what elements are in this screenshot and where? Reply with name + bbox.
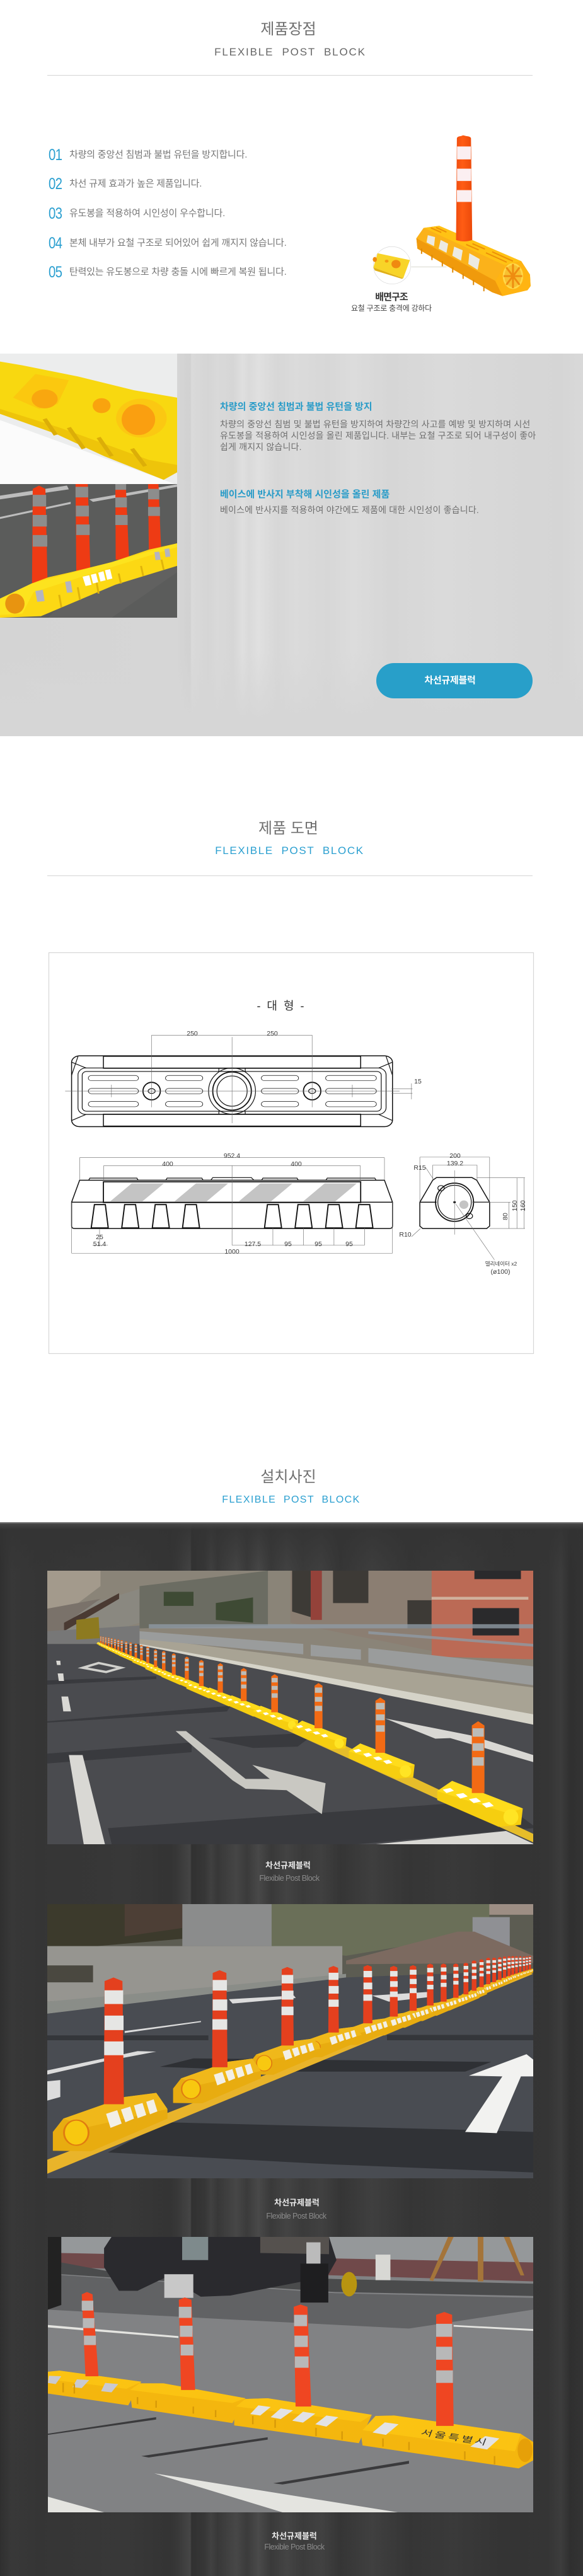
button: 차선규제블럭	[424, 675, 475, 686]
heading: installation photos: 설치사진	[260, 1469, 316, 1486]
photo 3: close-up of posts and blocks	[48, 2237, 533, 2512]
inset title: 배면구조	[375, 292, 408, 303]
feature 2 body: 베이스에 반사지를 적용하여 야간에도 제품에 대한 시인성이 좋습니다.	[220, 505, 479, 515]
list item 05: 탄력있는 유도봉으로 차량 충돌 시에 빠르게 복원 됩니다.	[69, 267, 287, 277]
subtitle: FLEXIBLE POST BLOCK	[222, 1494, 361, 1505]
divider	[47, 875, 533, 876]
caption 2 title: 차선규제블럭	[274, 2198, 320, 2207]
orange posts	[82, 2292, 454, 2426]
list item 01: 차량의 중앙선 침범과 불법 유턴을 방지합니다.	[69, 149, 247, 160]
dimension labels: 95	[315, 1240, 322, 1248]
dimension labels: 200	[449, 1152, 461, 1160]
dimension labels: 139.2	[447, 1160, 463, 1167]
end view of block	[412, 1157, 525, 1260]
section heading: installation photos	[222, 1469, 361, 1505]
top view of block	[65, 1035, 412, 1126]
photo: posts on road	[0, 484, 177, 618]
dimension labels: 127.5	[245, 1240, 261, 1248]
dimension labels: 1000	[224, 1248, 240, 1256]
list item 02: 02	[49, 175, 62, 193]
drawing title: - 대 형 -	[257, 1000, 304, 1012]
yellow bases	[0, 543, 177, 618]
button	[376, 663, 533, 698]
dimension labels: 95	[345, 1240, 353, 1248]
dimension labels: 델리네이터 x2	[485, 1261, 517, 1267]
side view of block	[72, 1158, 393, 1253]
heading: product drawing: 제품 도면	[258, 820, 318, 837]
list item 03	[49, 205, 225, 222]
dimension labels: 250	[267, 1030, 278, 1037]
dimension labels: R10	[399, 1231, 412, 1239]
dimension labels: R15	[413, 1164, 426, 1172]
caption 1 title: 차선규제블럭	[265, 1861, 311, 1870]
block lettering: 서울특별시	[419, 2428, 490, 2447]
list item 02	[49, 175, 202, 193]
feature 2 heading: 베이스에 반사지 부착해 시인성을 올린 제품	[220, 489, 390, 500]
caption 2 subtitle: Flexible Post Block	[266, 2212, 326, 2221]
feature 1 body: 차량의 중앙선 침범 및 불법 유턴을 방지하여 차량간의 사고를 예방 및 방지하며 시선 유도봉을 적용하여 시인성을 올린 제품입니다. 내부는 요철 구조로 되어 내구성이 좋아 쉽게 깨지지 않습니다.	[220, 419, 536, 452]
list item 03: 유도봉을 적용하여 시인성이 우수합니다.	[69, 208, 225, 219]
dimension labels: 25	[96, 1233, 103, 1241]
list item 04: 본체 내부가 요철 구조로 되어있어 쉽게 깨지지 않습니다.	[69, 238, 287, 248]
list item 01	[49, 146, 247, 164]
caption 3 subtitle: Flexible Post Block	[264, 2543, 325, 2551]
panel: dark photo band	[0, 1522, 583, 2576]
block base	[417, 226, 531, 296]
inset caption: 요철 구조로 충격에 강하다	[351, 304, 432, 313]
photo: close-up of block underside	[0, 354, 177, 484]
list item 04: 04	[49, 234, 62, 252]
section: product advantages	[47, 21, 533, 313]
dimension labels: 400	[291, 1160, 302, 1168]
list item 05: 05	[49, 263, 62, 281]
subtitle: FLEXIBLE POST BLOCK	[214, 46, 366, 58]
dimension labels: 160	[519, 1200, 527, 1211]
dimension labels: 51.4	[93, 1240, 106, 1248]
panel: grey feature band	[0, 354, 583, 736]
heading: product advantages: 제품장점	[260, 21, 316, 38]
divider under heading	[47, 75, 533, 76]
connector line	[411, 266, 446, 268]
dimension labels: 15	[414, 1078, 422, 1085]
yellow block segments	[48, 2371, 533, 2468]
list item 03: 03	[49, 205, 62, 222]
dimension labels: 80	[502, 1213, 509, 1220]
dimension labels: 952.4	[224, 1152, 240, 1160]
flexible post	[456, 136, 472, 241]
caption 1 subtitle: Flexible Post Block	[259, 1874, 320, 1883]
photo 1: post line on overpass road	[47, 1571, 533, 1844]
dimension labels: 95	[284, 1240, 292, 1248]
section heading: drawing	[47, 820, 533, 876]
list item 02: 차선 규제 효과가 높은 제품입니다.	[69, 178, 202, 189]
posts	[32, 484, 161, 585]
feature 1 heading: 차량의 중앙선 침범과 불법 유턴을 방지	[220, 401, 372, 412]
dimension labels: 400	[162, 1160, 173, 1168]
product illustration: post on yellow block	[372, 135, 531, 296]
photo 2: post line beside fence	[47, 1904, 533, 2178]
list item 04	[49, 234, 287, 252]
panel: technical drawing	[49, 952, 534, 1354]
inset circle: rear structure	[372, 246, 411, 284]
list item 05	[49, 263, 287, 281]
subtitle: FLEXIBLE POST BLOCK	[215, 845, 364, 857]
dimension labels: 150	[511, 1200, 519, 1211]
list item 01: 01	[49, 146, 62, 164]
dimension labels	[93, 1030, 527, 1276]
dimension labels: 250	[187, 1030, 198, 1037]
dimension labels: (ø100)	[491, 1268, 510, 1276]
caption 3 title: 차선규제블럭	[272, 2531, 317, 2541]
